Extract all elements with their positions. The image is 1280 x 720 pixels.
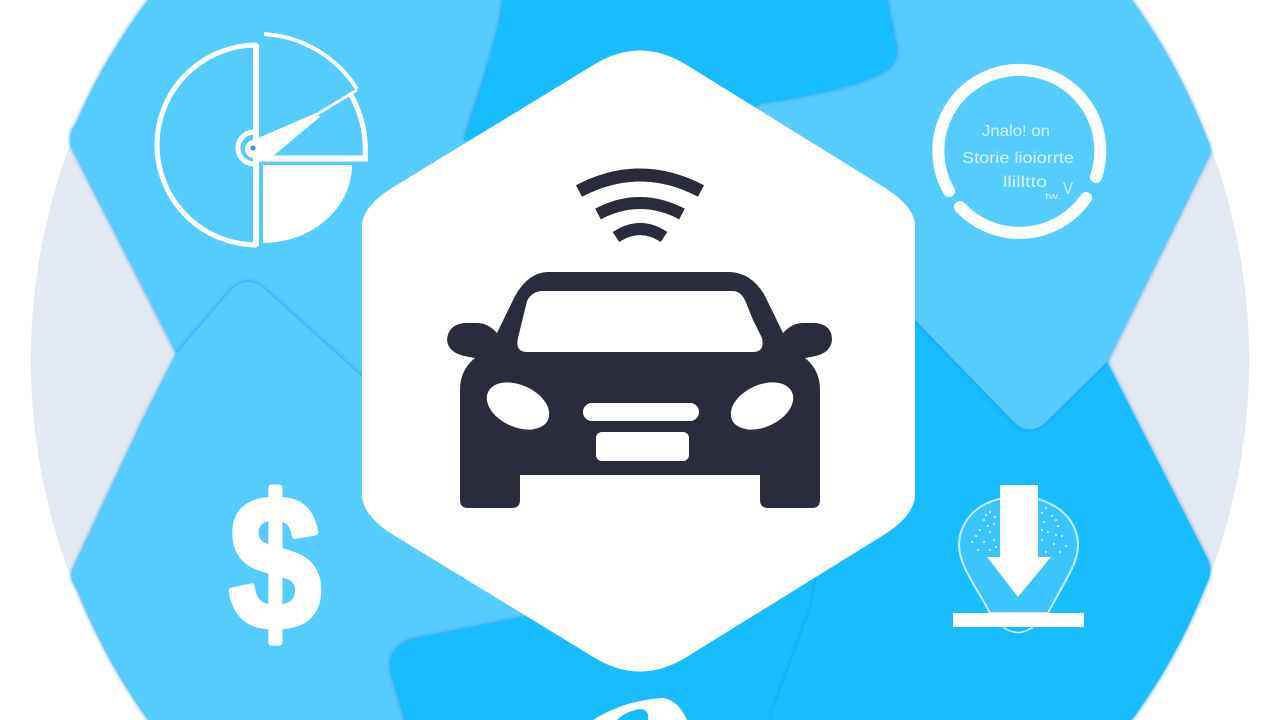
icon: gauge pie chart [157, 34, 368, 246]
panel: bottom-center petal [390, 500, 900, 720]
panel: top-left petal [70, 0, 560, 420]
panel: bottom-left petal [72, 282, 600, 720]
ring text: Storie lioiorrte [962, 150, 1074, 167]
ring text [962, 123, 1074, 201]
ring text: tw. [1045, 191, 1061, 201]
ring text: llilltto [1003, 174, 1047, 191]
panel: central white hexagon [362, 50, 915, 672]
icon: download arrow over map pin [953, 485, 1084, 632]
icon: circular ring with text [938, 70, 1100, 233]
icon: partly visible bottom shape [593, 698, 687, 720]
ring text: Jnalo! on [982, 123, 1050, 140]
icon: dollar sign: $ [229, 457, 321, 669]
car: grille [583, 403, 699, 421]
car: number plate [596, 432, 689, 461]
car: left headlight [479, 373, 557, 439]
car: right headlight [723, 373, 801, 439]
icon: car front view [447, 272, 832, 508]
icon: wifi signal [579, 175, 701, 237]
panel: top-right petal [700, 0, 1210, 430]
panel: bottom-right petal [772, 320, 1210, 720]
panel: top-center petal [464, 0, 897, 140]
ring text: V [1063, 179, 1074, 198]
